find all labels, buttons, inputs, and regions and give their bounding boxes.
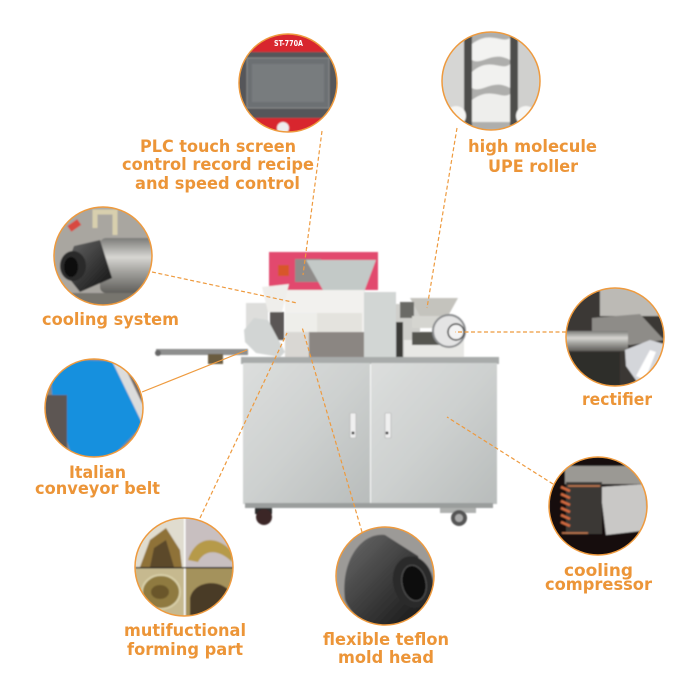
red control panel (269, 252, 378, 290)
heading: high molecule UPE roller: UPE roller (488, 157, 579, 177)
cabinet (241, 357, 499, 508)
heading: Italian conveyor belt: conveyor belt (35, 479, 160, 499)
conveyor arm (155, 349, 248, 364)
callout: conveyor belt photo (45, 359, 143, 457)
machine (155, 252, 499, 526)
heading: mutifuctional forming part: forming part (127, 640, 243, 660)
leader lines (142, 128, 566, 532)
callout: UPE roller photo (442, 32, 540, 130)
heading: mutifuctional forming part (124, 621, 246, 660)
casters (255, 508, 476, 526)
heading: PLC touch screen: control record recipe (122, 155, 314, 175)
heading: Italian conveyor belt: Italian (69, 463, 126, 483)
heading: flexible teflon mold head: mold head (338, 648, 434, 668)
heading: cooling compressor (545, 561, 653, 595)
heading: Italian conveyor belt (35, 463, 160, 499)
main hopper (306, 260, 376, 292)
heading: flexible teflon mold head: flexible teflon (323, 630, 449, 650)
label: model number: ST-770A (274, 39, 304, 48)
forming head and cover (244, 284, 289, 357)
heading: flexible teflon mold head (323, 630, 449, 668)
heading: high molecule UPE roller: high molecule (468, 137, 597, 157)
extruder body (285, 290, 396, 357)
heading: high molecule UPE roller (468, 137, 597, 177)
heading: cooling compressor: compressor (545, 575, 653, 595)
heading: PLC touch screen: PLC touch screen (140, 137, 296, 157)
callout: touch screen photo (238, 33, 338, 134)
callout: cooling compressor photo (549, 457, 649, 557)
callout: rectifier photo (566, 288, 664, 386)
heading: PLC touch screen (122, 137, 314, 194)
heading: PLC touch screen: and speed control (135, 174, 300, 194)
heading: cooling system: cooling system (42, 310, 179, 330)
right roller unit (396, 298, 465, 357)
callout: forming part photo (135, 518, 235, 618)
heading: cooling compressor: cooling (564, 561, 633, 581)
heading: mutifuctional forming part: mutifuctional (124, 621, 246, 641)
callout: cooling system photo (54, 207, 155, 307)
heading: rectifier: rectifier (582, 390, 653, 410)
callout: teflon mold head photo (336, 527, 438, 627)
